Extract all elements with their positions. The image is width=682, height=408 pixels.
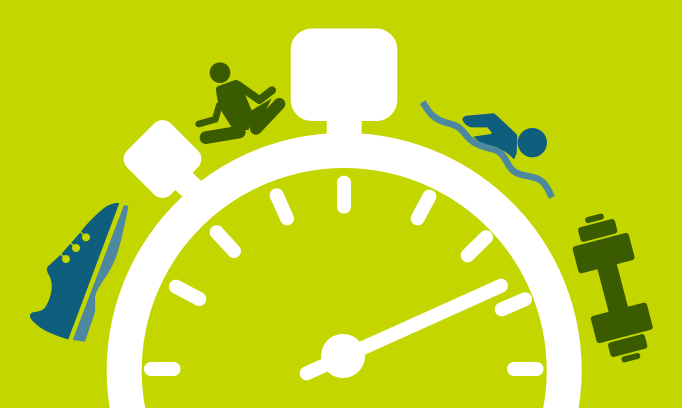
water wave xyxy=(423,102,552,197)
shoe laces xyxy=(60,232,89,262)
swimmer head xyxy=(518,128,547,157)
minute ticks xyxy=(151,183,536,369)
watch ring xyxy=(107,133,582,408)
stopwatch xyxy=(107,28,582,408)
icon: swimmer xyxy=(423,102,552,197)
icon: running shoe xyxy=(30,203,128,342)
inner plates xyxy=(572,232,635,274)
end caps xyxy=(585,213,605,224)
middle plates xyxy=(577,218,618,242)
torso and limbs xyxy=(199,80,279,138)
icon: seated stretching person xyxy=(199,62,279,138)
handle xyxy=(596,260,629,316)
shoe upper xyxy=(30,203,119,339)
icon: dumbbell xyxy=(566,208,660,368)
needle xyxy=(307,286,501,378)
top crown button xyxy=(291,28,397,140)
swimmer body xyxy=(462,113,517,159)
side button xyxy=(119,115,206,203)
head xyxy=(210,62,230,83)
shoe sole xyxy=(73,205,128,342)
